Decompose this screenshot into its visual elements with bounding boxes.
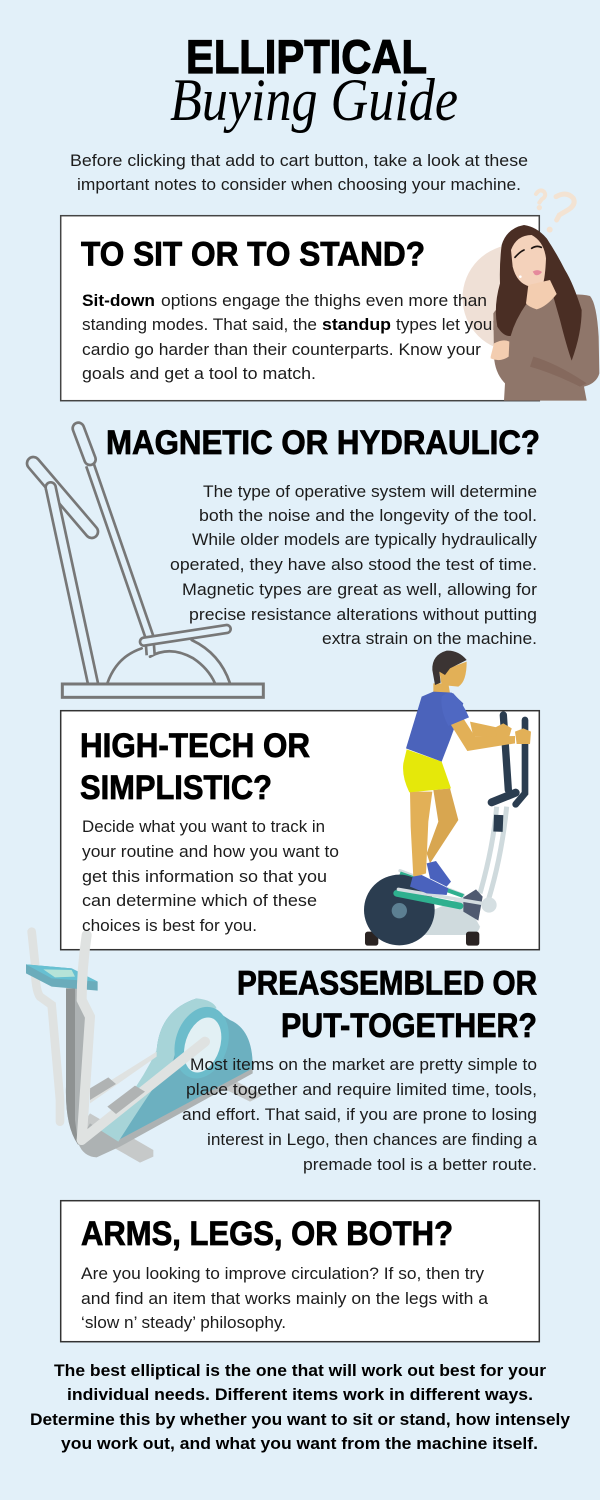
closing summary: The best elliptical is the one that will work out best for your (54, 1361, 546, 1380)
title: Buying Guide (170, 67, 458, 133)
title (170, 30, 458, 133)
body text: sit or stand: goals and get a tool to match. (82, 365, 316, 383)
body text: preassembled: interest in Lego, then chances are finding a (207, 1131, 538, 1149)
intro text: important notes to consider when choosing your machine. (77, 176, 521, 194)
body text: arms, legs: Are you looking to improve circulation? If so, then try (81, 1265, 485, 1283)
closing summary (30, 1361, 571, 1453)
body text: sit or stand: Sit-down (82, 292, 155, 310)
illustration: isometric elliptical (26, 932, 263, 1163)
body text: magnetic or hydraulic: Magnetic types are great as well, allowing for (182, 581, 538, 599)
heading: high-tech or simplistic: SIMPLISTIC? (80, 769, 272, 807)
heading: preassembled or put-together: PUT-TOGETHER? (281, 1007, 537, 1045)
title: ELLIPTICAL (186, 30, 427, 83)
body text: sit or stand: cardio go harder than their counterparts. Know your (82, 341, 482, 359)
body text: preassembled (182, 1056, 538, 1174)
body text: preassembled: Most items on the market are pretty simple to (190, 1056, 537, 1074)
body text: preassembled: and effort. That said, if you are prone to losing (182, 1106, 537, 1124)
panel: arms, legs, or both (61, 1201, 539, 1342)
heading: preassembled or put-together (237, 964, 537, 1045)
body text: sit or stand: types let your (396, 316, 499, 334)
body text: magnetic or hydraulic: While older models are typically hydraulically (192, 531, 538, 549)
decorative peach circle (462, 244, 570, 352)
illustration: person on elliptical (364, 651, 531, 946)
body text: sit or stand: standing modes. That said, the (82, 316, 317, 334)
illustration: thinking woman (491, 190, 599, 401)
body text: high-tech: can determine which of these (82, 892, 317, 910)
panel: to sit or to stand (61, 216, 569, 401)
body text: high-tech: choices is best for you. (82, 917, 257, 935)
body text: sit or stand (82, 292, 499, 383)
heading: magnetic or hydraulic: MAGNETIC OR HYDRAULIC? (106, 424, 540, 462)
heading: to sit or to stand: TO SIT OR TO STAND? (81, 236, 425, 274)
heading: high-tech or simplistic: HIGH-TECH OR (80, 727, 310, 765)
intro text (70, 152, 528, 194)
illustration: elliptical outline (33, 428, 263, 697)
intro text: Before clicking that add to cart button, take a look at these (70, 152, 528, 170)
body text: magnetic or hydraulic: The type of operative system will determine (203, 483, 537, 501)
closing summary: you work out, and what you want from the machine itself. (61, 1434, 538, 1453)
body text: magnetic or hydraulic: both the noise and the longevity of the tool. (199, 507, 537, 525)
closing summary: individual needs. Different items work in different ways. (67, 1385, 533, 1404)
body text: magnetic or hydraulic: operated, they have also stood the test of time. (170, 556, 537, 574)
body text: sit or stand: standup (322, 316, 391, 334)
body text: magnetic or hydraulic (170, 483, 538, 648)
body text: magnetic or hydraulic: extra strain on the machine. (322, 630, 537, 648)
body text: high-tech (82, 818, 339, 935)
panel: high-tech or simplistic (61, 711, 539, 950)
body text: preassembled: premade tool is a better route. (303, 1156, 537, 1174)
body text: sit or stand: options engage the thighs even more than (161, 292, 487, 310)
body text: arms, legs (81, 1265, 489, 1332)
body text: high-tech: get this information so that you (82, 868, 327, 886)
body text: high-tech: your routine and how you want to (82, 843, 339, 861)
heading: arms, legs, or both: ARMS, LEGS, OR BOTH? (81, 1215, 453, 1253)
body text: preassembled: place together and require limited time, tools, (186, 1081, 537, 1099)
heading: high-tech or simplistic (80, 727, 310, 807)
body text: arms, legs: ‘slow n’ steady’ philosophy. (81, 1314, 286, 1332)
body text: arms, legs: and find an item that works mainly on the legs with a (81, 1290, 489, 1308)
body text: high-tech: Decide what you want to track in (82, 818, 325, 836)
body text: magnetic or hydraulic: precise resistance alterations without putting (189, 606, 537, 624)
closing summary: Determine this by whether you want to sit or stand, how intensely (30, 1410, 571, 1429)
heading: preassembled or put-together: PREASSEMBLED OR (237, 964, 537, 1002)
